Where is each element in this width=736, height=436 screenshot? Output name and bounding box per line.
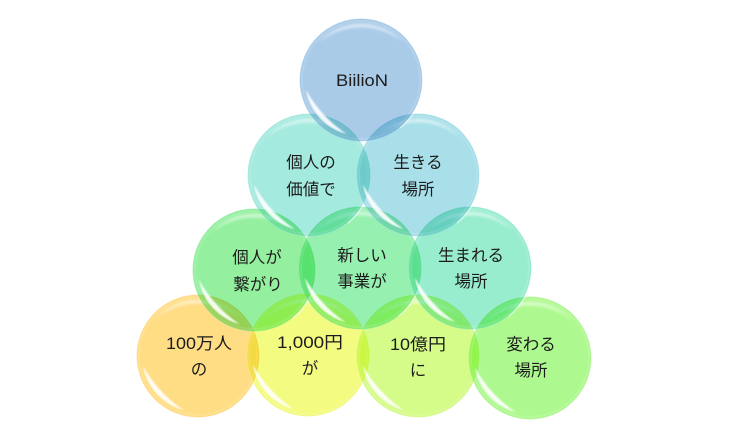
bubble: 100万人の: 100万人 [166, 335, 233, 353]
bubble: 変わる場所: 場所 [514, 361, 548, 380]
bubble: 個人の価値で: 価値で [286, 180, 336, 199]
bubble: 10億円に [357, 295, 480, 417]
bubble: 生きる場所 [357, 114, 480, 236]
bubble: 個人が繋がり [193, 209, 316, 331]
bubble: 個人が繋がり: 個人が [232, 248, 282, 267]
bubble: 生まれる場所: 生まれる [438, 246, 504, 265]
bubble: 新しい事業が: 事業が [337, 272, 387, 291]
bubble: 生きる場所: 場所 [402, 180, 434, 199]
bubble: BiilioN [300, 19, 423, 141]
bubble: 個人の価値で: 個人の [286, 153, 336, 172]
bubble: 個人が繋がり: 繋がり [233, 275, 283, 294]
bubble: 生まれる場所 [409, 207, 532, 329]
bubble: 1,000円が: が [302, 359, 319, 378]
bubble: 10億円に: に [410, 362, 426, 380]
bubble: 100万人の: の [191, 361, 207, 379]
bubble: 100万人の [137, 295, 260, 417]
bubble: 個人の価値で [248, 114, 371, 236]
bubble: 変わる場所: 変わる [506, 335, 556, 354]
bubble: 1,000円が [247, 294, 370, 416]
bubble: BiilioN: BiilioN [336, 72, 388, 90]
bubble: 生きる場所: 生きる [393, 153, 443, 172]
bubble: 10億円に: 10億円 [390, 335, 446, 354]
bubble: 新しい事業が: 新しい [337, 246, 387, 265]
bubble: 1,000円が: 1,000円 [277, 334, 343, 352]
bubble: 新しい事業が [299, 207, 422, 329]
bubble: 生まれる場所: 場所 [454, 272, 488, 291]
bubble: 変わる場所 [469, 297, 592, 419]
